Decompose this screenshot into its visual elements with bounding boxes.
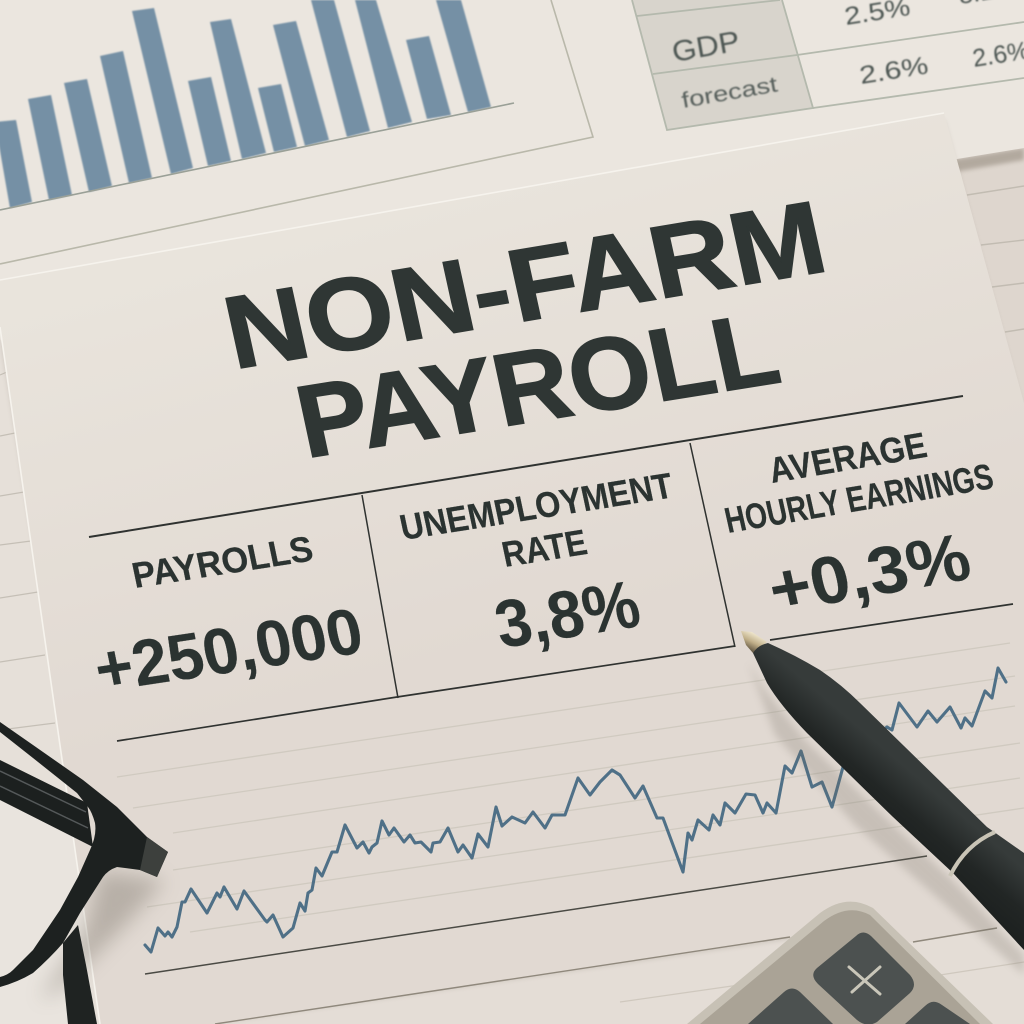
title: NON-FARM xyxy=(214,179,836,391)
panel: lined paper left xyxy=(0,270,110,1024)
metric: unemployment rate: UNEMPLOYMENT xyxy=(396,465,676,548)
pen tip xyxy=(741,631,767,653)
row label: forecast: forecast xyxy=(680,71,779,113)
line chart xyxy=(117,643,1024,974)
value: 2.6%: 2.6% xyxy=(858,51,930,90)
bar chart xyxy=(0,0,491,208)
panel: bar chart sheet xyxy=(0,0,1024,340)
lower temple arm xyxy=(63,925,97,1024)
plus key xyxy=(813,932,914,1024)
panel: sheet below xyxy=(620,962,1024,1002)
metric: payrolls xyxy=(88,528,369,706)
calculator key right xyxy=(905,1002,970,1024)
title: PAYROLL xyxy=(286,290,789,480)
panel: lined paper right xyxy=(940,140,1024,440)
metric: unemployment rate: 3,8% xyxy=(489,567,646,663)
panel: GDP forecast table xyxy=(632,0,1024,130)
row label: GDP: GDP xyxy=(670,26,742,69)
calculator key left xyxy=(748,988,833,1024)
icon: ballpoint pen xyxy=(741,631,1024,950)
hinge xyxy=(140,837,168,877)
metric: average hourly earnings xyxy=(721,424,997,628)
frame rim xyxy=(0,722,168,987)
icon: calculator xyxy=(687,902,993,1024)
pen ring xyxy=(950,832,995,876)
pen body xyxy=(753,643,1024,950)
metric: unemployment rate xyxy=(396,465,676,663)
metrics table rules xyxy=(89,396,1013,741)
icon: glasses xyxy=(0,722,168,1024)
metric: unemployment rate: RATE xyxy=(498,521,591,575)
metric: payrolls: PAYROLLS xyxy=(128,528,316,596)
metric: payrolls: +250,000 xyxy=(88,594,369,706)
metric: average hourly earnings: +0,3% xyxy=(761,519,977,628)
metric: average hourly earnings: AVERAGE xyxy=(765,424,931,491)
chart frame xyxy=(0,0,593,264)
title xyxy=(214,179,836,480)
folded temple arm xyxy=(0,760,93,847)
